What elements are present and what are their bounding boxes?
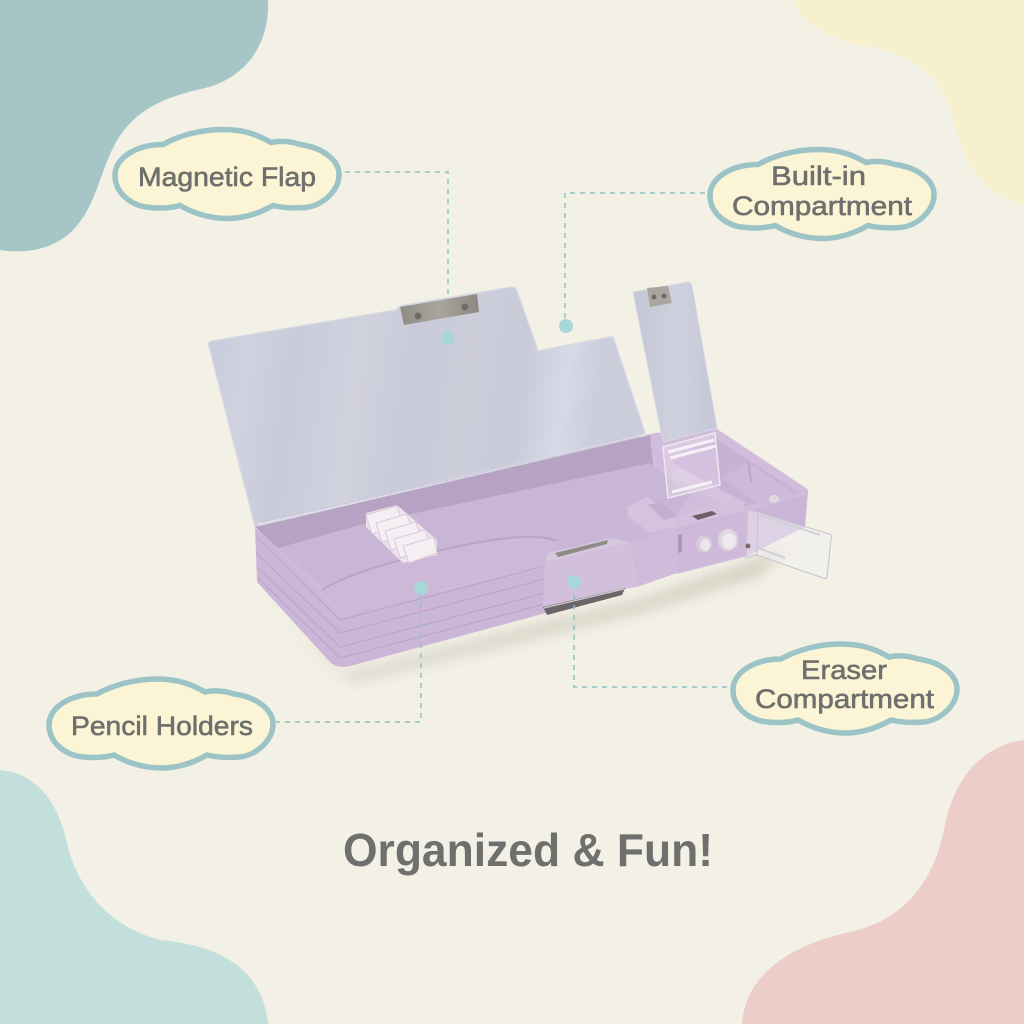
product: pencil case bbox=[208, 282, 831, 682]
tray back wall bbox=[255, 435, 653, 549]
tray outer faces with ribs bbox=[255, 528, 548, 667]
corner blob: top right bbox=[793, 0, 1024, 205]
callout: built-in compartment: Built-in bbox=[771, 161, 866, 191]
pencil holder divider bbox=[322, 537, 557, 613]
metal clip bbox=[400, 294, 479, 325]
callout: built-in compartment: Compartment bbox=[732, 191, 913, 221]
small metal clip bbox=[647, 286, 672, 307]
small flap lid bbox=[633, 282, 717, 442]
corner blob: top left bbox=[0, 0, 268, 251]
clear flip cover bbox=[663, 433, 720, 498]
callout: pencil holders: Pencil Holders bbox=[71, 711, 253, 741]
callout: eraser compartment bbox=[733, 644, 957, 733]
callout: magnetic flap: Magnetic Flap bbox=[138, 162, 316, 192]
white pencil holder slots bbox=[366, 505, 437, 563]
clear side door bbox=[746, 510, 831, 578]
ground shadow bbox=[262, 545, 790, 682]
right back compartment bbox=[640, 429, 808, 574]
raised block bbox=[627, 497, 678, 540]
corner blob: bottom right bbox=[742, 740, 1024, 1024]
connector: built-in compartment bbox=[559, 193, 705, 333]
connector: eraser compartment bbox=[567, 575, 727, 687]
callout: magnetic flap bbox=[115, 130, 339, 218]
callout: eraser compartment: Eraser bbox=[801, 655, 887, 685]
connector: magnetic flap bbox=[345, 172, 455, 345]
title: Organized & Fun! bbox=[343, 824, 713, 876]
corner blob: bottom left bbox=[0, 770, 268, 1024]
divider strip bbox=[668, 468, 746, 511]
tray floor bbox=[278, 463, 690, 610]
front panel bbox=[630, 527, 677, 587]
connector: pencil holders bbox=[275, 581, 428, 722]
main lid bbox=[208, 287, 648, 530]
callout: built-in compartment bbox=[710, 150, 934, 238]
centre clasp panel bbox=[543, 538, 637, 615]
callout: eraser compartment: Compartment bbox=[755, 684, 935, 714]
callout: pencil holders bbox=[49, 679, 273, 768]
eraser and sharpener compartment bbox=[677, 500, 747, 573]
